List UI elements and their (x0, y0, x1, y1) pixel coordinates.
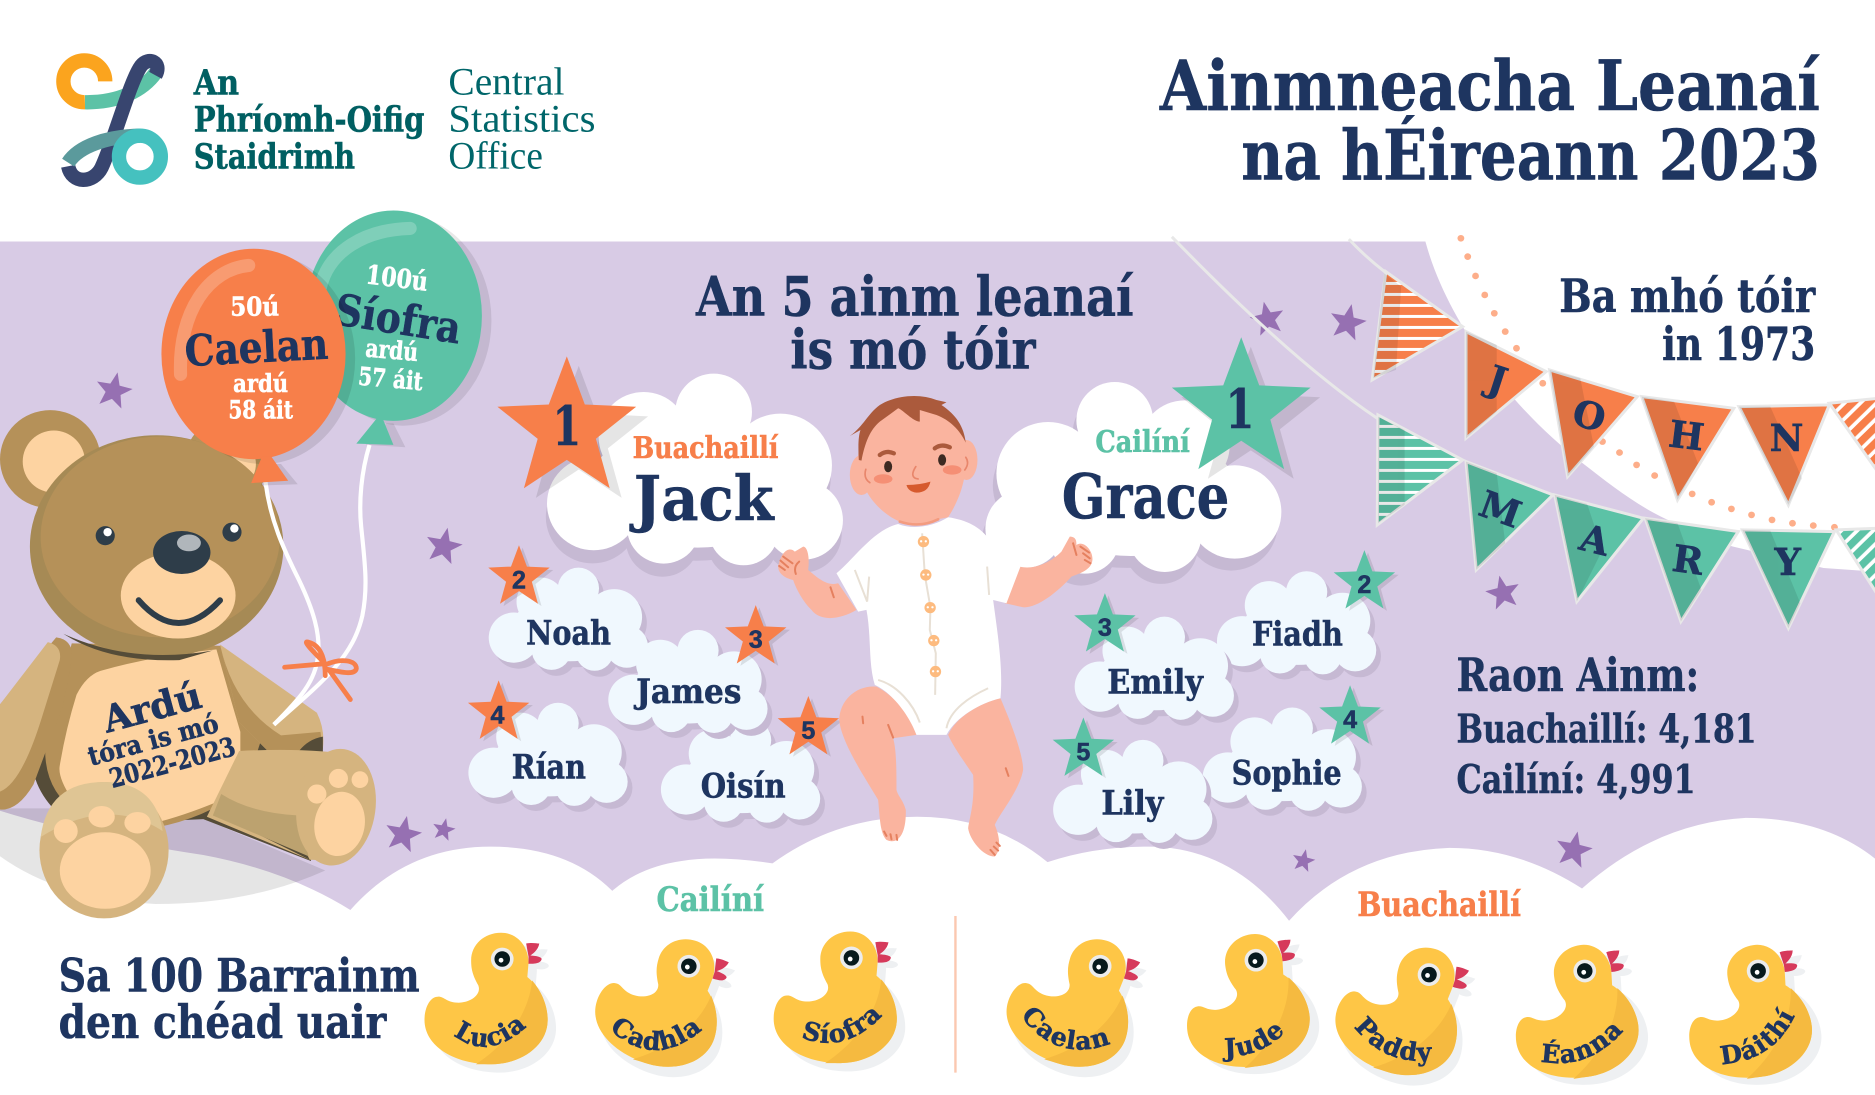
bunting letters: MARY: A (1575, 515, 1615, 565)
bunting letters: MARY: R (1670, 536, 1706, 584)
balloon: Caelan, 50th: 58 áit (228, 395, 293, 425)
cloud: Rían rank 4: 4 (490, 701, 504, 729)
cloud: James rank 3 (608, 605, 790, 739)
duck: Caelan: Caelan (1024, 1008, 1110, 1050)
logo text: Irish name: Phríomh-Oifig (194, 100, 425, 141)
duck: Lucia (424, 932, 556, 1072)
duck: Éanna: Éanna (1541, 1025, 1624, 1064)
bear ground shadow (0, 808, 325, 904)
cloud: number 1 boy Jack (546, 374, 843, 578)
cloud: Oisín rank 5 (661, 696, 843, 829)
cloud: Rían rank 4: Rían (512, 747, 586, 786)
balloon: Síofra, 100th: ardú (364, 333, 419, 367)
divider between girls and boys (954, 916, 957, 1073)
duck: Lucia: Lucia (454, 1020, 527, 1048)
heading: most popular in 1973 (1559, 269, 1816, 371)
baby illustration (778, 396, 1092, 857)
balloon: Síofra, 100th (305, 210, 491, 447)
duck: Síofra: Síofra (802, 1009, 882, 1044)
bear belly (59, 649, 240, 822)
heading: first time in top 100 (59, 948, 420, 1049)
cloud: number 1 girl Grace: Grace (1062, 460, 1229, 533)
heading: most popular in 1973: Ba mhó tóir (1559, 269, 1816, 323)
balloon: Caelan, 50th: ardú (233, 368, 288, 398)
bear head (30, 435, 283, 660)
star: boys rank 1: 1 (552, 394, 581, 458)
label: girls ducks: Cailíní (656, 880, 764, 919)
cloud: Lily rank 5 (1053, 717, 1217, 849)
cloud: number 1 girl Grace (982, 382, 1281, 586)
cloud: number 1 boy Jack: Buachaillí (633, 431, 779, 466)
bear belly text: 2022-2023 (106, 731, 239, 795)
cloud: Emily rank 3: Emily (1107, 663, 1204, 702)
ribbon bow (285, 642, 356, 700)
title (1159, 46, 1820, 196)
balloon: Síofra, 100th: 100ú (364, 259, 430, 298)
bunting: MARY flags (1377, 415, 1875, 628)
bear belly text (85, 673, 239, 795)
logo text: English name: Central (448, 59, 564, 103)
logo text: English name: Statistics (448, 97, 596, 141)
cloud: number 1 boy Jack: Jack (629, 462, 775, 535)
bunting letters: JOHN: O (1568, 390, 1611, 441)
bunting letters: JOHN (1480, 355, 1803, 460)
cloud: Noah rank 2 (488, 545, 653, 677)
duck: Síofra (774, 932, 905, 1072)
heading: most popular in 1973: in 1973 (1662, 317, 1815, 371)
bunting letters: MARY (1474, 481, 1801, 584)
cloud: Sophie rank 4: 4 (1343, 706, 1357, 734)
heading: top 5 baby names: An 5 ainm leanaí (695, 265, 1134, 329)
logo text: Irish name (193, 62, 425, 178)
bear left ear (0, 410, 100, 508)
balloon: Caelan, 50th: 50ú (230, 292, 279, 323)
baby arms (778, 537, 1092, 618)
bear belly text: Ardú (97, 673, 206, 742)
logo text: Irish name: An (193, 62, 239, 103)
cloud: Fiadh rank 2 (1217, 550, 1399, 680)
cloud: Fiadh rank 2: 2 (1357, 571, 1371, 599)
background panel: lilac sky band (0, 242, 1875, 921)
baby onesie (836, 517, 1020, 735)
bunting letters: MARY: Y (1773, 540, 1801, 584)
balloon: Caelan, 50th (161, 249, 355, 485)
duck: Cadhla (595, 939, 735, 1077)
bunting: dotted garland (1457, 235, 1838, 531)
duck: Cadhla: Cadhla (613, 1018, 702, 1050)
duck: Dáithí: Dáithí (1720, 1006, 1795, 1065)
bunting letters: JOHN: J (1480, 355, 1513, 403)
duck: Dáithí (1689, 944, 1822, 1085)
star: boys rank 1 (497, 356, 648, 498)
duck: Caelan (1006, 939, 1146, 1077)
text block: name range stats: Raon Ainm: (1456, 648, 1699, 702)
cloud: James rank 3: 3 (749, 626, 763, 654)
bunting: JOHN flags (1372, 272, 1875, 505)
bear left foot (39, 782, 169, 918)
cloud: number 1 girl Grace: Cailíní (1095, 425, 1190, 460)
cloud: Emily rank 3: 3 (1098, 614, 1112, 642)
logo text: Irish name: Staidrimh (194, 137, 355, 178)
cloud: Lily rank 5: 5 (1076, 739, 1090, 767)
cloud: James rank 3: James (633, 672, 741, 711)
balloon: Síofra, 100th: 57 áit (357, 361, 424, 396)
heading: first time in top 100: Sa 100 Barrainm (59, 948, 420, 1002)
text block: name range stats (1456, 648, 1757, 803)
cloud: Noah rank 2: Noah (526, 614, 611, 653)
baby head (850, 396, 977, 524)
bunting letters: MARY: M (1474, 481, 1527, 537)
bunting letters: JOHN: N (1770, 416, 1803, 460)
text block: name range stats: Buachaillí: 4,181 (1456, 707, 1757, 753)
bear right ear (185, 419, 269, 502)
text block: name range stats: Cailíní: 4,991 (1456, 757, 1696, 803)
duck: Éanna (1516, 944, 1648, 1085)
star: girls rank 1: 1 (1226, 377, 1254, 441)
duck: Jude: Jude (1222, 1025, 1282, 1062)
cloud: Noah rank 2: 2 (512, 566, 526, 594)
logo text: English name (448, 59, 596, 178)
bear face (96, 523, 242, 639)
cloud: Sophie rank 4 (1203, 685, 1384, 817)
cloud: Rían rank 4 (468, 680, 632, 812)
bear right leg and foot (207, 744, 383, 871)
cloud: Oisín rank 5: 5 (801, 717, 815, 745)
bunting strings (1172, 237, 1386, 419)
cloud: Emily rank 3 (1074, 593, 1239, 726)
balloon strings (265, 445, 369, 725)
balloon: Caelan, 50th: Caelan (183, 320, 329, 377)
cloud: Oisín rank 5: Oisín (701, 767, 786, 806)
star: girls rank 1 (1172, 337, 1320, 479)
bear arms (0, 637, 323, 810)
decorative stars (93, 298, 1595, 873)
bear back shadow and body (32, 643, 323, 861)
heading: top 5 baby names (695, 265, 1134, 381)
logo: Central Statistics Office symbol (63, 60, 161, 180)
balloon: Síofra, 100th: Síofra (331, 285, 465, 354)
label: boys ducks: Buachaillí (1357, 885, 1521, 924)
bunting letters: JOHN: H (1666, 412, 1707, 459)
cloud: Lily rank 5: Lily (1101, 783, 1165, 822)
cloud: Sophie rank 4: Sophie (1232, 753, 1342, 792)
duck: Paddy: Paddy (1354, 1015, 1432, 1067)
heading: top 5 baby names: is mó tóir (790, 317, 1036, 381)
bear belly text: tóra is mó (85, 708, 222, 773)
logo text: English name: Office (448, 134, 543, 178)
heading: first time in top 100: den chéad uair (59, 995, 387, 1049)
cloud: Fiadh rank 2: Fiadh (1252, 615, 1343, 654)
teddy bear (0, 410, 383, 918)
baby legs (779, 543, 1090, 857)
duck: Paddy (1335, 948, 1475, 1086)
duck: Jude (1187, 934, 1319, 1074)
